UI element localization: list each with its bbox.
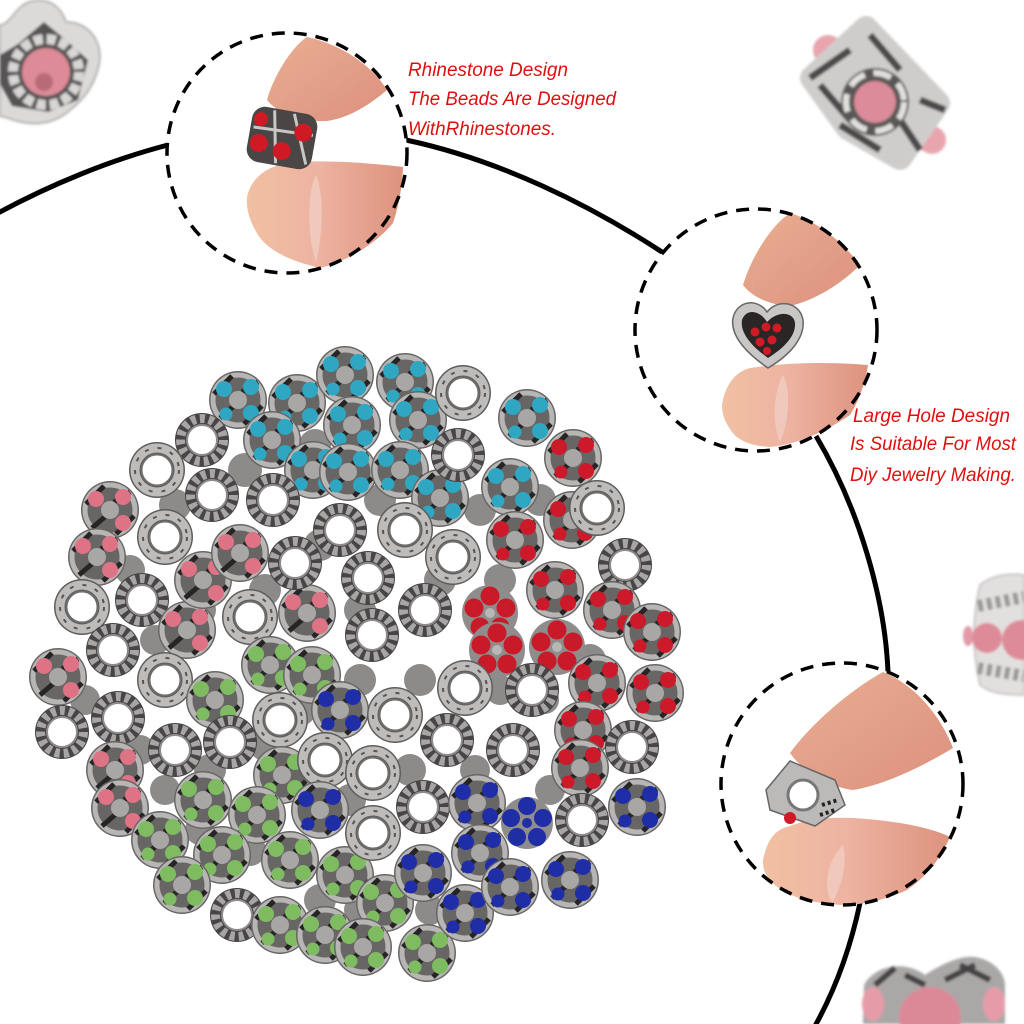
heading: large hole callout: Is Suitable For Most (850, 434, 1017, 455)
heart bead (733, 303, 803, 368)
dashed ring (635, 209, 877, 451)
panel: heart bead close-up (635, 209, 877, 451)
pile under-layer (70, 429, 606, 926)
panel: large hole close-up (721, 663, 963, 905)
top finger (743, 213, 860, 306)
rhinestone bead (245, 105, 319, 171)
green beads (131, 636, 456, 982)
centre silver rings (268, 502, 481, 662)
heading: large hole callout (850, 406, 1017, 486)
large hole bead (766, 761, 845, 826)
heading: large hole callout: Diy Jewelry Making. (850, 465, 1016, 486)
bottom finger (247, 161, 403, 268)
bead pile (29, 346, 684, 982)
dashed ring (167, 33, 407, 273)
decorative bead: right edge (963, 574, 1024, 695)
heading: large hole callout: Large Hole Design (853, 406, 1010, 427)
heading: rhinestone design callout: The Beads Are Designed (408, 89, 617, 110)
decorative bead: top-right barrel (810, 28, 946, 158)
decorative bead: bottom-right heart (862, 957, 1005, 1024)
heading: rhinestone design callout: Rhinestone Design (408, 60, 568, 81)
top finger (790, 672, 953, 790)
connecting arc (0, 140, 888, 1024)
bottom finger (763, 818, 950, 905)
red beads (437, 429, 684, 797)
heading: rhinestone design callout: WithRhinestones. (408, 119, 556, 140)
pink beads (29, 442, 336, 837)
decorative bead: top-left flower (0, 0, 100, 123)
panel: rhinestone close-up (167, 33, 407, 273)
teal beads (175, 346, 556, 527)
top finger (267, 37, 387, 121)
dashed ring (721, 663, 963, 905)
blue beads (291, 681, 666, 942)
heading: rhinestone design callout (408, 60, 617, 140)
bottom finger (722, 363, 868, 447)
